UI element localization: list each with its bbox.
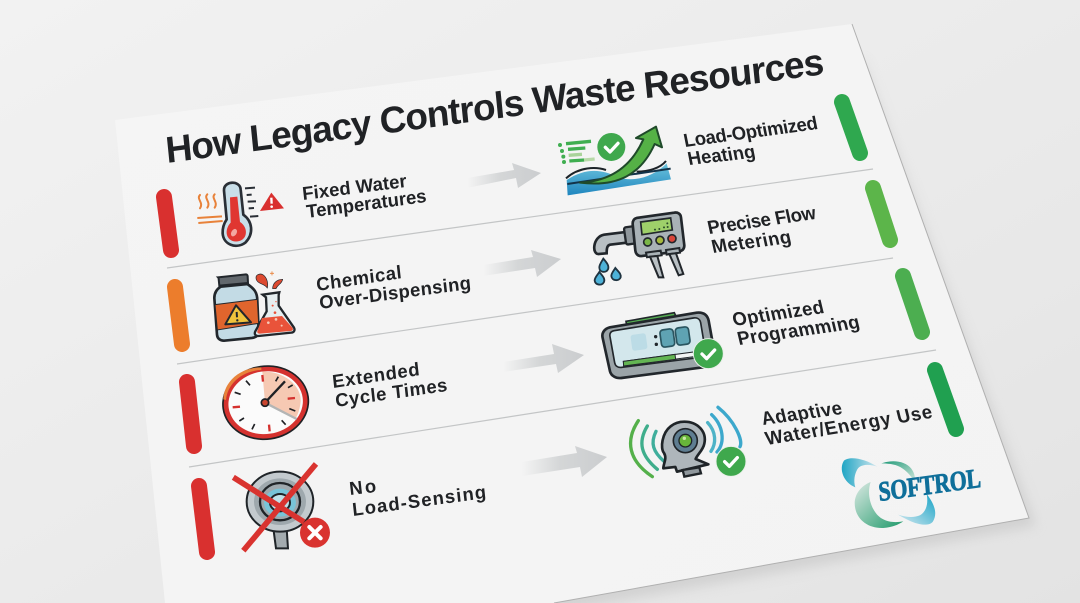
text: adaptive water/energy use: Water/Energy Use xyxy=(763,401,934,449)
icon: thermometer with warning xyxy=(197,183,284,246)
row 3: extended cycle times to optimized programming xyxy=(187,276,922,446)
logo: softrol xyxy=(842,458,982,528)
text: no load-sensing: No xyxy=(348,475,377,499)
row 1: fixed water temperatures to load-optimized heating xyxy=(164,102,860,250)
row 4: no load-sensing to adaptive water/energy use xyxy=(199,370,956,552)
paper edge xyxy=(554,24,1029,603)
bar: red severity xyxy=(199,486,207,552)
icon: adaptive sensor with waves and check xyxy=(631,407,746,477)
logo: softrol: SOFTROL xyxy=(877,464,982,508)
text: load-optimized heating: Load-Optimized xyxy=(682,112,819,151)
bar: green outcome xyxy=(935,370,956,429)
text: optimized programming xyxy=(730,296,862,349)
text: fixed water temperatures: Temperatures xyxy=(305,185,427,222)
title: How Legacy Controls Waste Resources xyxy=(164,40,826,171)
bar: red severity xyxy=(187,382,194,446)
text: chemical over-dispensing: Chemical xyxy=(315,261,403,295)
bar: red severity xyxy=(164,197,171,250)
arrow xyxy=(467,163,541,188)
row 2: chemical over-dispensing to precise flow metering xyxy=(175,188,890,344)
text: adaptive water/energy use: Adaptive xyxy=(759,397,844,429)
icon: rising green arrow over water with check xyxy=(558,127,671,195)
bar: green outcome xyxy=(903,276,922,332)
text: optimized programming: Programming xyxy=(735,311,862,349)
text: precise flow metering xyxy=(705,202,818,257)
icon: chemical bottle and flask xyxy=(214,271,295,341)
icon: programmable timer with check xyxy=(602,313,723,378)
arrow xyxy=(483,250,561,277)
text: load-optimized heating xyxy=(682,112,819,169)
text: fixed water temperatures xyxy=(301,170,427,222)
bar: orange severity xyxy=(175,287,182,344)
icon: faucet with digital meter xyxy=(594,213,684,285)
arrow xyxy=(522,446,607,477)
arrow xyxy=(503,344,584,373)
text: load-optimized heating: Heating xyxy=(686,141,757,169)
bar: green outcome xyxy=(842,102,860,153)
icon: clock xyxy=(217,360,314,446)
text: no load-sensing: Load-Sensing xyxy=(351,481,487,520)
text: chemical over-dispensing: Over-Dispensing xyxy=(318,272,472,313)
paper shadow xyxy=(520,60,1036,603)
icon: crossed-out sensor xyxy=(233,464,330,551)
bar: green outcome xyxy=(873,188,890,240)
text: optimized programming: Optimized xyxy=(730,296,826,330)
row separators xyxy=(167,169,936,467)
text: extended cycle times: Extended xyxy=(331,358,421,392)
text: extended cycle times xyxy=(331,358,448,411)
text: precise flow metering: Metering xyxy=(709,226,793,257)
text: extended cycle times: Cycle Times xyxy=(334,374,448,411)
text: precise flow metering: Precise Flow xyxy=(705,202,818,238)
text: fixed water temperatures: Fixed Water xyxy=(301,170,408,204)
